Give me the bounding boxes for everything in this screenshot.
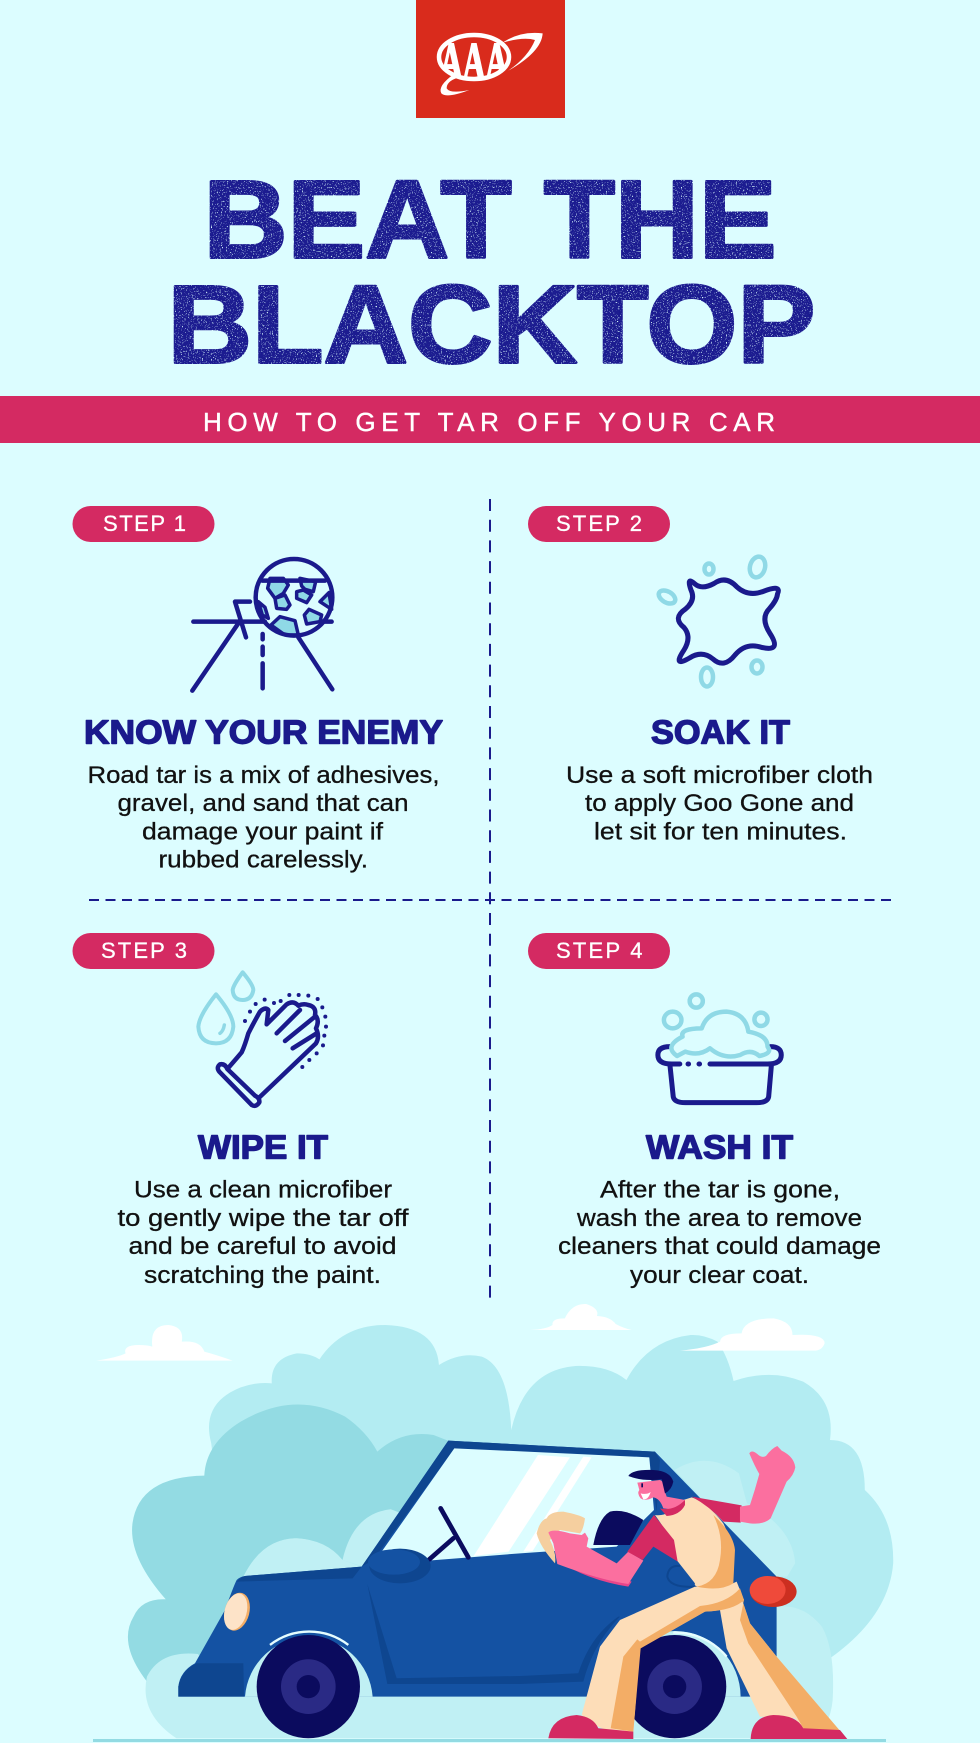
step 1 pill <box>72 506 214 542</box>
step 4 text <box>558 1176 881 1289</box>
far leg <box>720 1583 845 1737</box>
hair <box>628 1470 673 1493</box>
step 1 pill: STEP 1 <box>103 511 186 536</box>
shoes <box>548 1715 847 1739</box>
left sleeve <box>627 1515 678 1562</box>
window reflections <box>474 1455 592 1556</box>
subtitle banner: HOW TO GET TAR OFF YOUR CAR <box>203 407 775 437</box>
AAA logo <box>416 0 565 118</box>
AAA logo: AAA <box>440 32 508 92</box>
panel: step 1 <box>72 506 443 874</box>
step 1 text <box>88 762 440 874</box>
car window <box>382 1448 654 1561</box>
step 3 pill: STEP 3 <box>101 938 187 963</box>
man <box>537 1446 847 1739</box>
icon: wash tub with foam <box>658 994 781 1103</box>
headlight <box>220 1590 254 1634</box>
side mirror <box>368 1549 431 1583</box>
step 4 text: cleaners that could damage <box>558 1233 881 1260</box>
title: BEAT THE <box>204 158 776 282</box>
step 4 text: After the tar is gone, <box>600 1176 840 1204</box>
raised arm <box>740 1446 795 1524</box>
step 2 pill <box>528 506 670 542</box>
heading: wipe it: WIPE IT <box>198 1128 328 1166</box>
step 3 text: scratching the paint. <box>144 1262 381 1289</box>
panel: step 3 <box>72 933 409 1289</box>
door handle <box>667 1566 697 1587</box>
step 3 pill <box>72 933 214 969</box>
icon: road with tar zoom <box>192 559 332 691</box>
step 3 text <box>118 1176 409 1289</box>
step 1 text: damage your paint if <box>142 818 383 846</box>
ground line <box>93 1739 886 1742</box>
torso <box>655 1497 735 1589</box>
near leg <box>582 1582 744 1732</box>
title <box>168 158 816 386</box>
car <box>178 1441 797 1738</box>
pale cloud shapes <box>146 1461 833 1738</box>
tail light <box>750 1576 797 1607</box>
panel: step 4 <box>528 933 881 1289</box>
step 2 text: Use a soft microfiber cloth <box>566 762 873 789</box>
horizontal divider <box>89 899 893 901</box>
car seat <box>593 1511 643 1545</box>
step 4 text: your clear coat. <box>630 1262 809 1289</box>
step 1 text: gravel, and sand that can <box>118 790 408 817</box>
step 3 text: Use a clean microfiber <box>134 1176 392 1204</box>
white clouds <box>96 1304 825 1361</box>
front cloud <box>128 1404 455 1682</box>
steering wheel <box>429 1508 468 1559</box>
title: BLACKTOP <box>168 264 816 386</box>
step 2 pill: STEP 2 <box>556 511 642 536</box>
smile <box>641 1492 651 1499</box>
car details <box>178 1567 620 1697</box>
heading: know your enemy: KNOW YOUR ENEMY <box>84 714 443 750</box>
step 4 pill <box>528 933 670 969</box>
heading: wash it: WASH IT <box>646 1128 793 1166</box>
heading: soak it: SOAK IT <box>651 714 790 750</box>
collar <box>660 1500 685 1516</box>
step 4 pill: STEP 4 <box>556 938 642 963</box>
front wheel <box>245 1632 373 1738</box>
step 1 text: Road tar is a mix of adhesives, <box>88 762 440 789</box>
right sleeve <box>692 1497 742 1523</box>
cloth <box>537 1512 585 1563</box>
step 3 text: and be careful to avoid <box>128 1233 396 1260</box>
back cloud <box>209 1325 893 1697</box>
step 2 text: let sit for ten minutes. <box>594 818 847 846</box>
step 4 text: wash the area to remove <box>576 1205 862 1232</box>
vertical divider <box>489 499 491 1302</box>
wiping arm <box>548 1531 643 1587</box>
window frame <box>362 1441 660 1567</box>
panel: step 2 <box>528 506 873 846</box>
step 2 text: to apply Goo Gone and <box>585 790 854 817</box>
eye <box>641 1483 643 1487</box>
icon: glove wiping <box>198 972 328 1106</box>
step 1 text: rubbed carelessly. <box>158 846 368 874</box>
rear wheel <box>609 1631 741 1738</box>
car body <box>178 1441 796 1697</box>
icon: splat <box>656 555 778 686</box>
background clouds <box>96 1304 893 1738</box>
neck and face <box>637 1480 685 1510</box>
subtitle banner <box>0 396 980 443</box>
step 2 text <box>566 762 873 846</box>
step 3 text: to gently wipe the tar off <box>118 1205 409 1232</box>
illustration: man wiping car <box>93 1304 893 1742</box>
